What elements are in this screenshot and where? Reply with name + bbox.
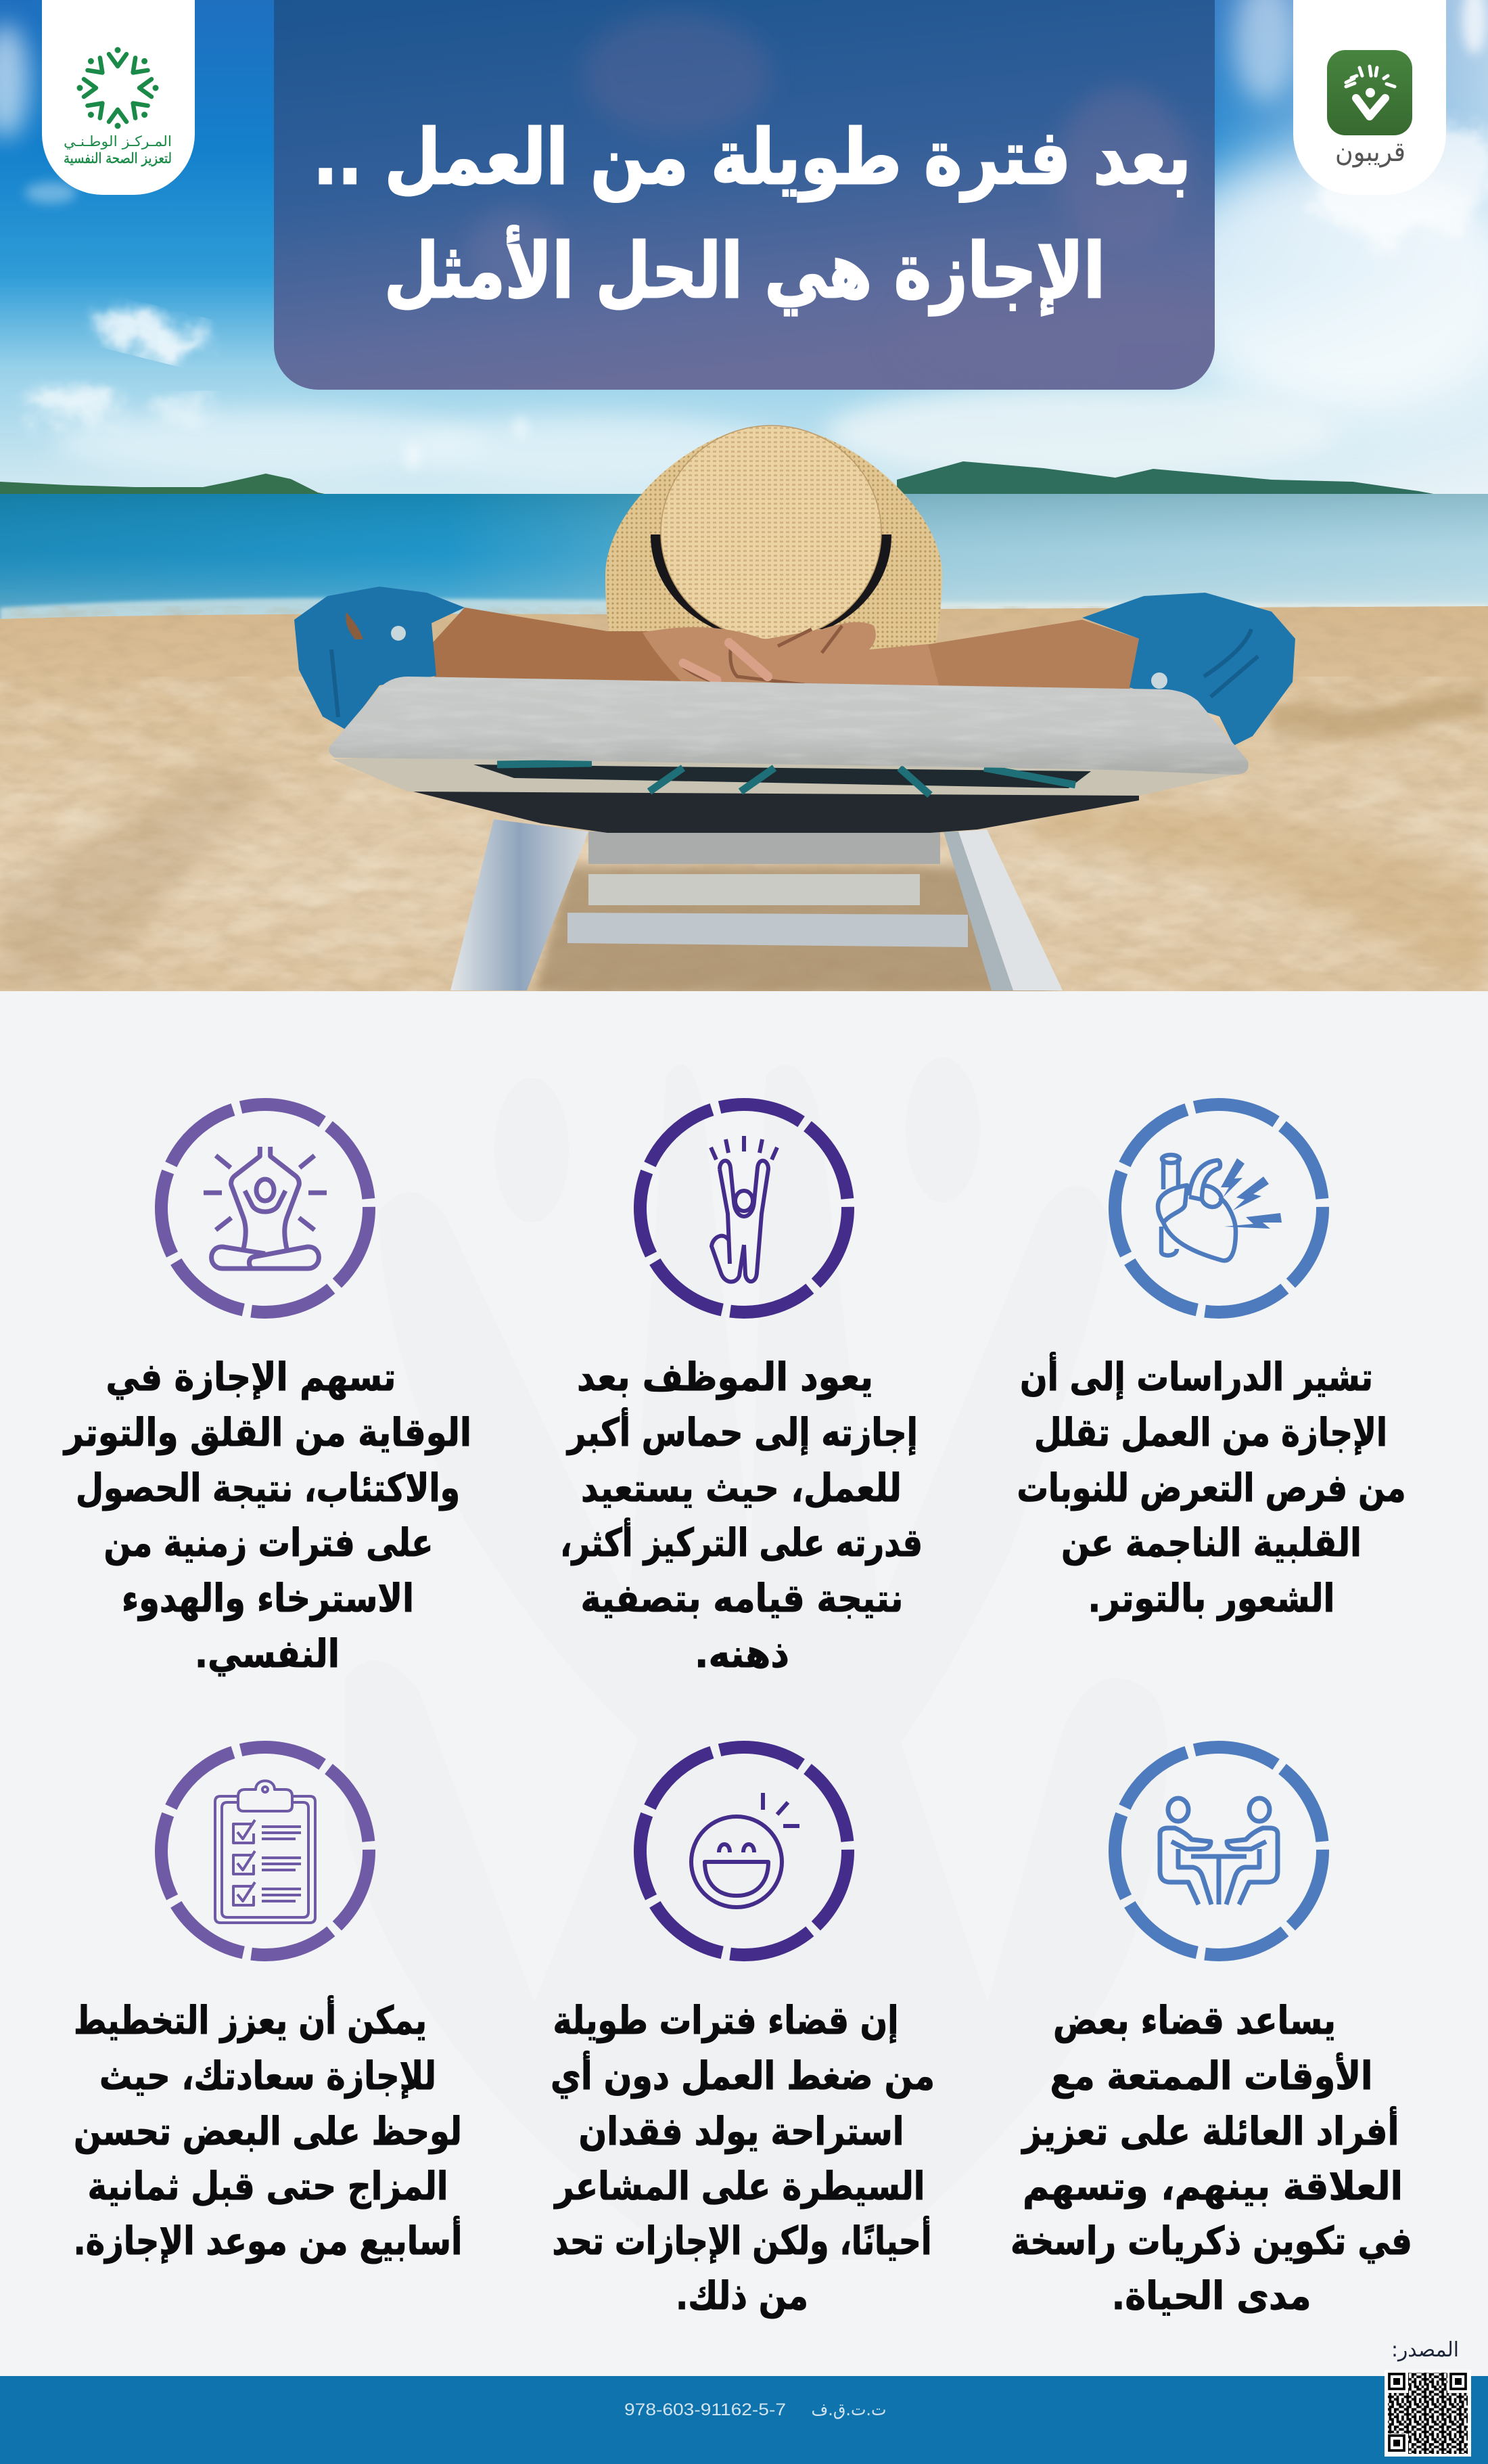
icon: two people at a table: [1073, 1706, 1364, 1997]
paragraph: نتيجة قيامه بتصفية: [580, 1576, 904, 1621]
paragraph: يساعد قضاء بعض: [1053, 1999, 1336, 2043]
paragraph: للإجازة سعادتك، حيث: [99, 2054, 436, 2099]
sky: [0, 0, 1488, 501]
paragraph: في تكوين ذكريات راسخة: [1010, 2219, 1412, 2264]
paragraph: من ذلك.: [676, 2274, 808, 2319]
icon: laughing face: [599, 1706, 889, 1997]
paragraph: تشير الدراسات إلى أن: [1020, 1352, 1373, 1400]
paragraph: والاكتئاب، نتيجة الحصول: [76, 1466, 460, 1511]
islands: [0, 461, 1441, 497]
icon: meditating person: [120, 1063, 411, 1354]
paragraph: المزاج حتى قبل ثمانية: [88, 2164, 448, 2209]
paragraph: النفسي.: [195, 1632, 340, 1676]
icon: jumping person: [599, 1063, 889, 1354]
paragraph: يعود الموظف بعد: [577, 1355, 873, 1400]
footer bar: [0, 2376, 1488, 2464]
paragraph: [62, 1355, 471, 1676]
paragraph: مدى الحياة.: [1112, 2274, 1311, 2319]
straw hat: [605, 426, 942, 653]
title text: الإجازة هي الحل الأمثل: [384, 225, 1105, 316]
source label: المصدر:: [1391, 2338, 1459, 2362]
paragraph: أسابيع من موعد الإجازة.: [73, 2216, 463, 2264]
paragraph: أفراد العائلة على تعزيز: [1021, 2106, 1399, 2154]
paragraph: [1017, 1352, 1405, 1621]
paragraph: على فترات زمنية من: [104, 1521, 433, 1566]
panel: work pressure: [551, 1706, 935, 2319]
QR code: [1385, 2370, 1471, 2457]
paragraph: يمكن أن يعزز التخطيط: [74, 1995, 427, 2043]
logo text: المـركـز الوطـنـي: [64, 133, 172, 150]
title text: [313, 114, 1191, 316]
ISBN text: 978-603-91162-5-7: [624, 2400, 786, 2419]
blue sleeves: [294, 587, 1295, 746]
panel: anxiety prevention: [62, 1063, 471, 1676]
paragraph: [73, 1995, 463, 2264]
panel: heart attack risk: [1017, 1063, 1405, 1621]
logo tab: qareeboon: [1293, 0, 1446, 195]
icon: ring of people: [77, 47, 158, 129]
logo text: لتعزيز الصحة النفسية: [64, 150, 172, 166]
paragraph: الاسترخاء والهدوء: [122, 1576, 414, 1621]
paragraph: قدرته على التركيز أكثر،: [560, 1518, 923, 1566]
paragraph: من ضغط العمل دون أي: [551, 2051, 935, 2099]
sea: [0, 494, 1488, 626]
title panel: [274, 0, 1217, 399]
paragraph: الأوقات الممتعة مع: [1050, 2053, 1373, 2099]
paragraph: [1010, 1999, 1412, 2319]
paragraph: إن قضاء فترات طويلة: [553, 1999, 898, 2044]
paragraph: السيطرة على المشاعر: [553, 2164, 925, 2209]
paragraph: [560, 1355, 923, 1676]
paragraph: العلاقة بينهم، وتسهم: [1023, 2164, 1403, 2209]
ISBN text: [624, 2400, 886, 2419]
lounger frame and legs: [332, 754, 1243, 990]
icon: heart with lightning bolts: [1073, 1063, 1364, 1354]
paragraph: القلبية الناجمة عن: [1061, 1521, 1362, 1566]
paragraph: استراحة يولد فقدان: [579, 2109, 904, 2154]
panel: family time: [1010, 1706, 1412, 2319]
arms and clasped hands: [422, 608, 1139, 691]
logo text: قريبون: [1335, 137, 1405, 168]
icon: checklist clipboard: [120, 1706, 411, 1997]
paragraph: من فرص التعرض للنوبات: [1017, 1466, 1405, 1511]
paragraph: تسهم الإجازة في: [106, 1355, 396, 1400]
paragraph: الإجازة من العمل تقلل: [1034, 1411, 1387, 1456]
paragraph: الوقاية من القلق والتوتر: [62, 1411, 471, 1455]
hero photo: man relaxing on a beach lounger: [0, 0, 1488, 995]
lounger head rest: [329, 677, 1249, 775]
title text: بعد فترة طويلة من العمل ..: [313, 114, 1191, 202]
paragraph: إجازته إلى حماس أكبر: [565, 1407, 918, 1456]
sand: [0, 606, 1488, 995]
paragraph: للعمل، حيث يستعيد: [581, 1466, 902, 1511]
icon: green app badge: [1327, 50, 1412, 135]
paragraph: لوحظ على البعض تحسن: [74, 2109, 462, 2154]
paragraph: [551, 1999, 935, 2319]
paragraph: ذهنه.: [695, 1632, 789, 1676]
paragraph: أحيانًا، ولكن الإجازات تحد: [552, 2216, 932, 2264]
panel: vacation planning: [73, 1706, 463, 2264]
ISBN text: ت.ت.ق.ف: [812, 2400, 886, 2419]
panel: renewed enthusiasm: [560, 1063, 923, 1676]
paragraph: الشعور بالتوتر.: [1088, 1576, 1335, 1621]
background watermark figures: [345, 1057, 1167, 2260]
logo tab: national center for mental health promotion: [42, 0, 195, 195]
logo text: [64, 133, 172, 166]
